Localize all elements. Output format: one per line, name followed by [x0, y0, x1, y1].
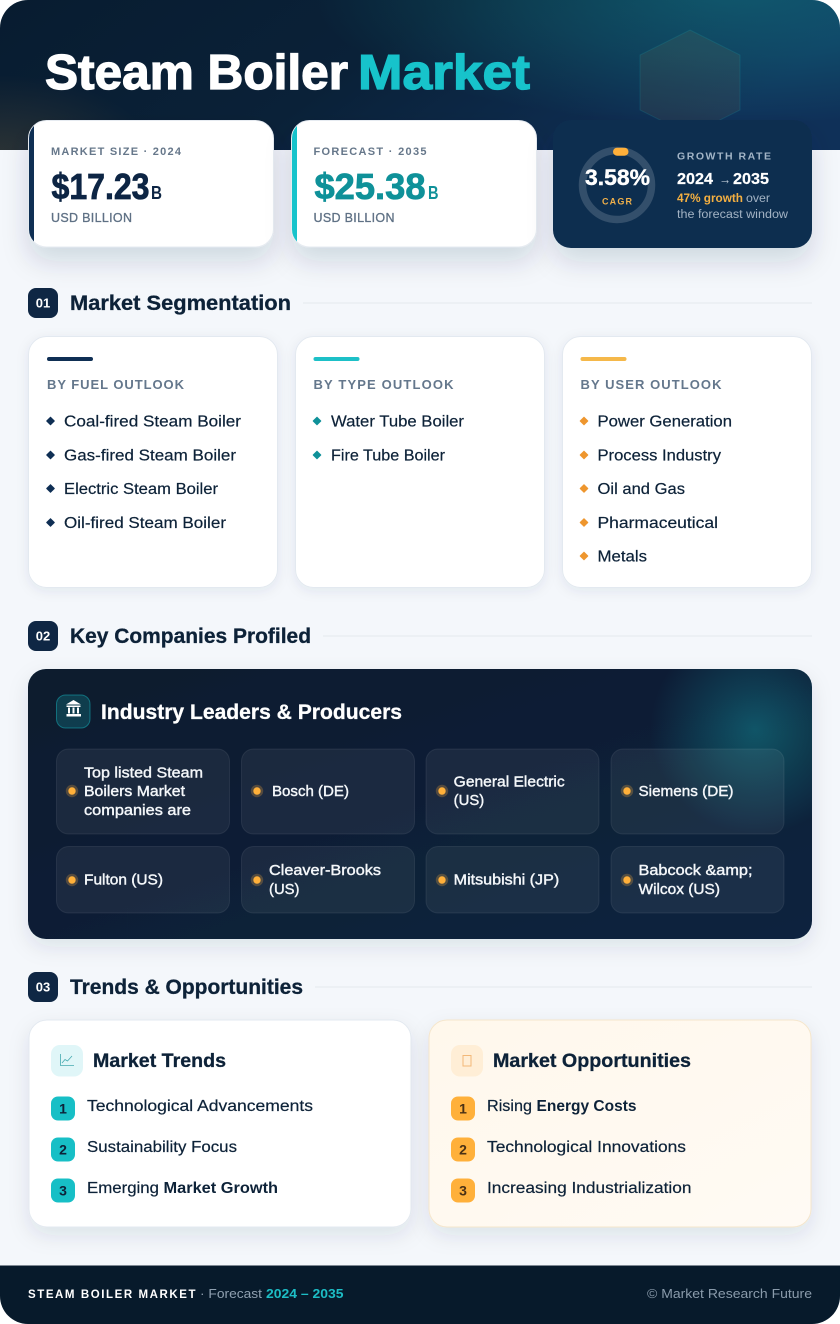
panel: user outlook: BY USER OUTLOOK — [580, 377, 722, 392]
section heading: market segmentation — [28, 288, 812, 318]
panel: type outlook — [296, 336, 544, 588]
stat card: growth rate: GROWTH RATE — [677, 150, 771, 162]
icon: missing glyph box — [451, 1045, 483, 1076]
stat card: growth rate: the forecast window — [677, 209, 789, 221]
company chip: Fulton: Fulton (US) — [84, 872, 163, 888]
title: Market — [358, 46, 530, 100]
company chip: General Electric: General Electric — [454, 774, 565, 790]
stat card: market size 2024 — [28, 120, 274, 248]
stat card: market size 2024: USD BILLION — [51, 211, 132, 225]
panel: fuel outlook: Gas-fired Steam Boiler — [64, 448, 236, 464]
stat card: market size 2024: B — [151, 183, 162, 203]
panel: fuel outlook: Coal-fired Steam Boiler — [64, 414, 241, 430]
icon: institution building — [56, 695, 90, 728]
company chip: Cleaver-Brooks — [242, 846, 414, 913]
stat card: growth rate: over — [746, 193, 770, 205]
panel: market opportunities: Market Opportunities — [493, 1050, 691, 1072]
donut: CAGR ring: 3.58% — [585, 165, 650, 190]
icon: chart line — [51, 1045, 83, 1076]
company chip: Mitsubishi — [426, 846, 599, 913]
panel: market opportunities: 1 — [459, 1100, 467, 1116]
panel: fuel outlook: BY FUEL OUTLOOK — [47, 377, 185, 392]
section heading: market segmentation: Market Segmentation — [70, 292, 291, 315]
stat card: market size 2024: $17.23 — [52, 166, 150, 207]
section heading: trends and opportunities: 03 — [36, 980, 50, 994]
panel: market trends: Technological Advancements — [87, 1098, 313, 1115]
company chip: Siemens: Siemens (DE) — [638, 784, 734, 800]
company chip: General Electric: (US) — [454, 793, 484, 809]
stat card: growth rate: → — [719, 171, 731, 187]
section heading: key companies: Key Companies Profiled — [70, 625, 311, 648]
footer: 2024 – 2035 — [266, 1287, 344, 1301]
panel: market opportunities: Technological Innovations — [487, 1139, 686, 1156]
stat card: market size 2024: MARKET SIZE · 2024 — [51, 146, 182, 158]
stat card: growth rate: 2024 — [677, 171, 713, 188]
panel: market opportunities — [429, 1020, 811, 1227]
panel: market trends: Market Trends — [93, 1050, 226, 1072]
stat card: forecast 2035 — [292, 120, 536, 248]
panel: market opportunities: 3 — [459, 1182, 467, 1198]
footer: STEAM BOILER MARKET — [28, 1289, 196, 1301]
title: Steam Boiler — [45, 46, 348, 100]
panel: user outlook: Metals — [598, 548, 647, 566]
section heading: key companies — [28, 621, 812, 651]
panel: fuel outlook — [28, 336, 278, 588]
donut: CAGR ring — [582, 150, 652, 220]
panel: market trends — [29, 1020, 411, 1227]
panel: market trends: Market Growth — [164, 1180, 278, 1197]
panel: type outlook: Fire Tube Boiler — [331, 448, 445, 464]
stat card: forecast 2035: $25.38 — [314, 166, 426, 207]
company chip: Cleaver-Brooks: (US) — [269, 882, 300, 898]
company chip: Mitsubishi: Mitsubishi (JP) — [454, 872, 559, 888]
panel: market trends: 2 — [59, 1142, 67, 1158]
header banner — [0, 0, 840, 150]
company chip: General Electric — [426, 749, 599, 834]
panel: market opportunities: Energy Costs — [536, 1098, 636, 1115]
section heading: trends and opportunities: Trends & Opportunities — [70, 976, 303, 999]
panel: market trends: 1 — [59, 1100, 67, 1116]
stat card: forecast 2035: B — [428, 183, 438, 203]
panel: user outlook: Oil and Gas — [598, 481, 685, 498]
footer: © Market Research Future — [647, 1287, 812, 1301]
panel: market trends: Emerging — [87, 1180, 159, 1197]
panel: fuel outlook: Electric Steam Boiler — [64, 481, 218, 498]
stat card: growth rate: 2035 — [733, 171, 769, 188]
icon: decorative hexagon — [640, 30, 740, 120]
panel: market trends: Sustainability Focus — [87, 1139, 237, 1156]
company chip: Fulton — [56, 846, 230, 913]
section heading: trends and opportunities — [28, 972, 812, 1002]
company chip: intro: Boilers Market — [84, 784, 185, 800]
panel: fuel outlook: Oil-fired Steam Boiler — [64, 515, 226, 532]
panel: user outlook: Process Industry — [598, 448, 721, 464]
company chip: intro: Top listed Steam — [84, 766, 203, 782]
company chip: intro: companies are — [84, 803, 191, 819]
panel: user outlook: Power Generation — [598, 414, 732, 430]
company chip: Cleaver-Brooks: Cleaver-Brooks — [269, 863, 381, 879]
company chip: Siemens — [611, 749, 784, 834]
donut: CAGR ring: CAGR — [602, 196, 632, 206]
company chip: Babcock and Wilcox — [611, 846, 784, 913]
stat card: forecast 2035: USD BILLION — [314, 211, 394, 225]
section heading: key companies: 02 — [36, 628, 50, 644]
panel: market opportunities: 2 — [459, 1142, 467, 1158]
stat card: growth rate: 47% growth — [677, 193, 743, 205]
panel: type outlook: BY TYPE OUTLOOK — [314, 377, 454, 392]
panel: type outlook: Water Tube Boiler — [331, 414, 464, 430]
footer: · Forecast — [200, 1287, 263, 1301]
panel: user outlook: Pharmaceutical — [598, 515, 718, 532]
section heading: market segmentation: 01 — [36, 296, 50, 310]
company chip: Bosch — [242, 749, 414, 834]
company chip: intro — [56, 749, 230, 834]
panel: user outlook — [562, 336, 812, 588]
company chip: Babcock and Wilcox: Wilcox (US) — [638, 882, 720, 898]
stat card: forecast 2035: FORECAST · 2035 — [314, 146, 426, 158]
company chip: Babcock and Wilcox: Babcock &amp; — [638, 863, 752, 879]
footer — [0, 1266, 840, 1324]
panel heading: Industry Leaders & Producers — [101, 701, 402, 724]
company chip: Bosch: Bosch (DE) — [272, 784, 349, 800]
panel: market opportunities: Rising — [487, 1098, 532, 1115]
panel: market opportunities: Increasing Industrialization — [487, 1180, 692, 1197]
stat card: growth rate — [553, 120, 812, 248]
panel: market trends: 3 — [59, 1182, 67, 1198]
panel: industry leaders — [28, 669, 812, 939]
title — [46, 52, 530, 90]
